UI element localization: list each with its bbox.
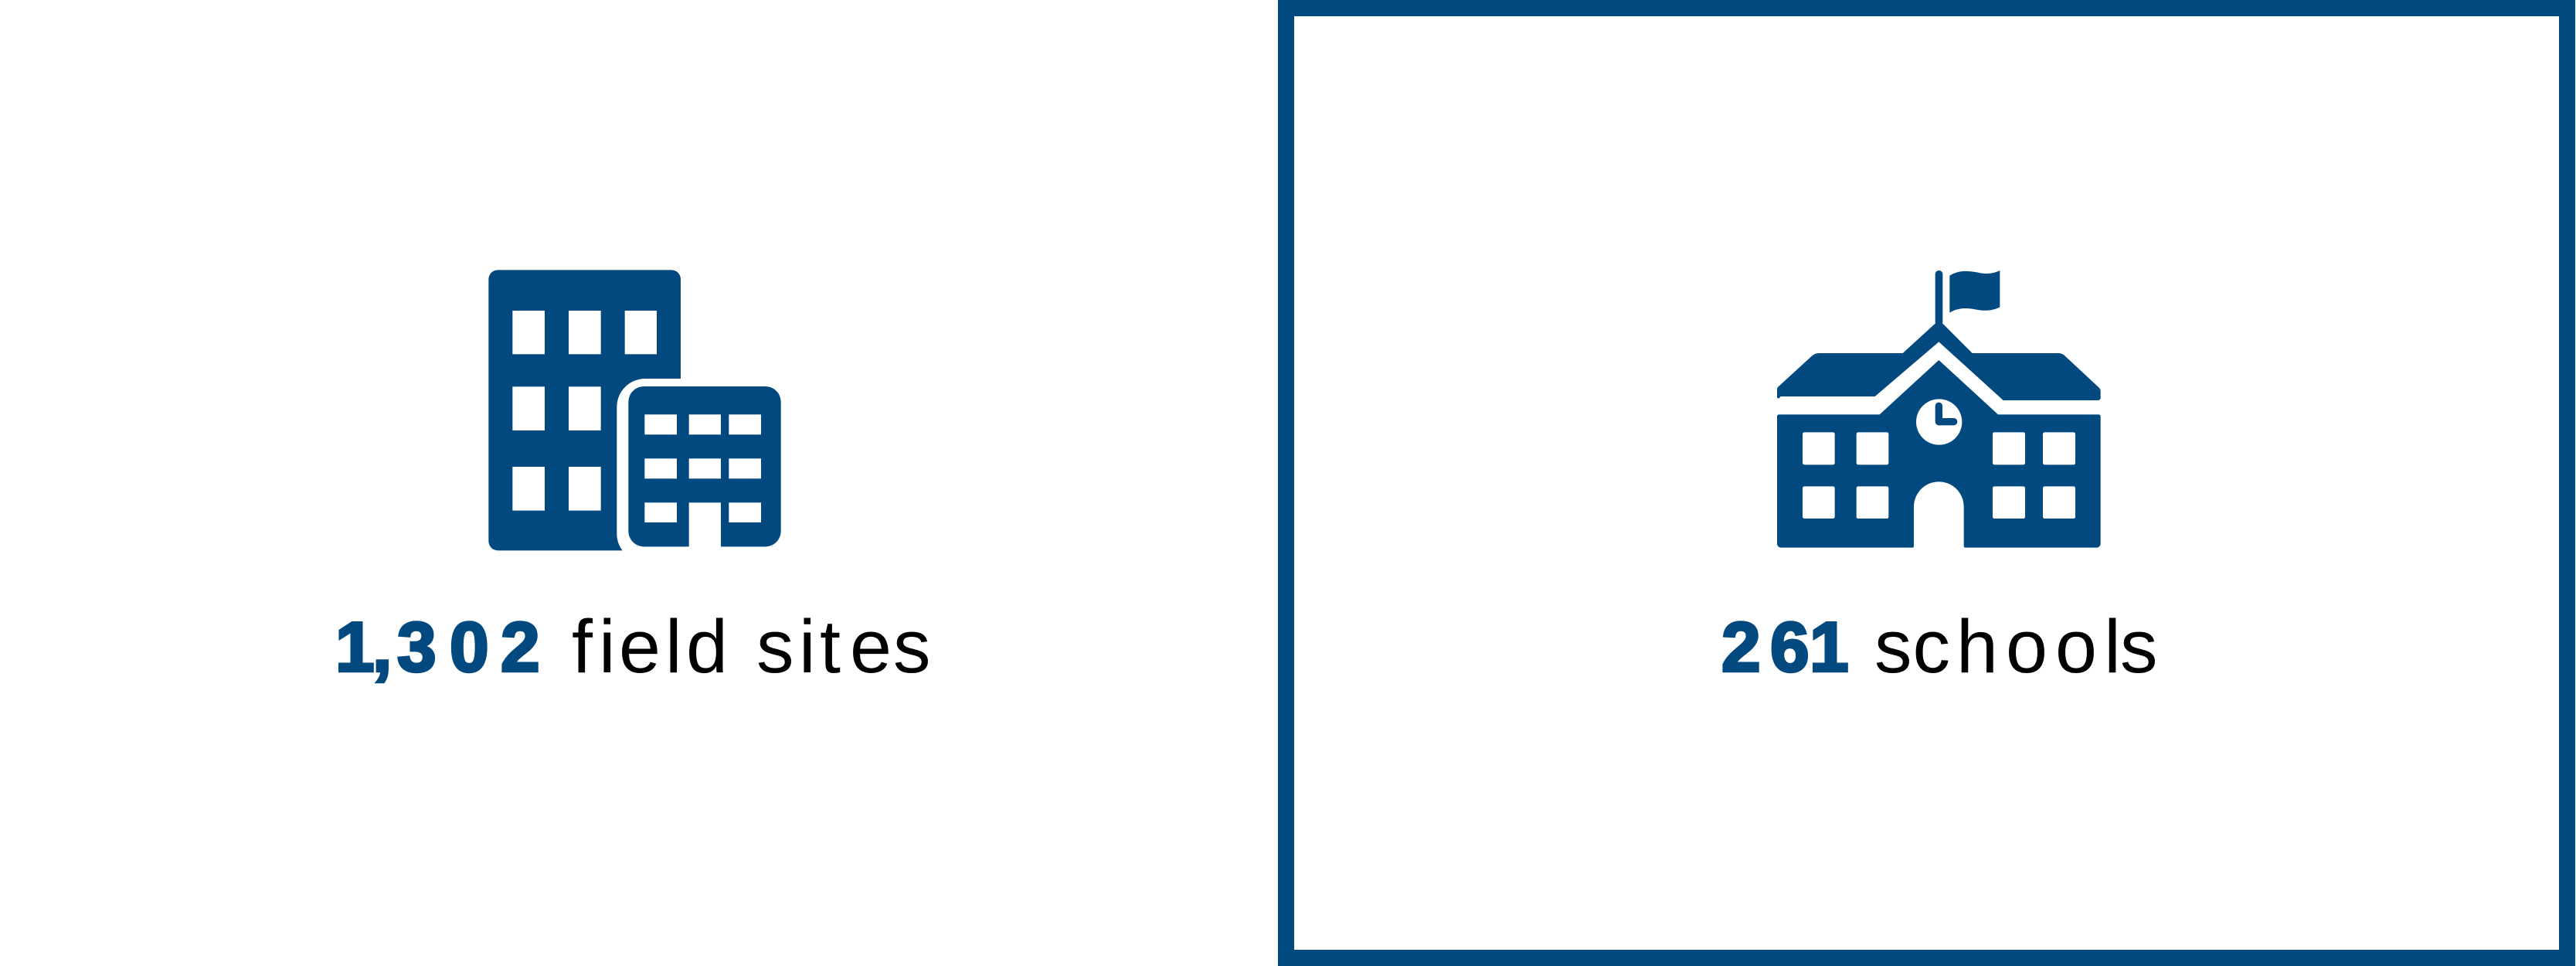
panel frame [1286, 8, 2567, 958]
panel: schools [1286, 8, 2567, 958]
label: 1,302 field sites [335, 604, 930, 689]
label: 261 schools: schools [1874, 604, 2157, 689]
panel: field sites [335, 270, 930, 689]
label: 1,302 field sites: field sites [572, 604, 930, 689]
icon: school building [1777, 270, 2101, 548]
label: 261 schools: 261 [1721, 609, 1849, 686]
icon: office buildings [488, 270, 781, 550]
label: 1,302 field sites: 1,302 [335, 609, 540, 686]
label: 261 schools [1721, 604, 2157, 689]
